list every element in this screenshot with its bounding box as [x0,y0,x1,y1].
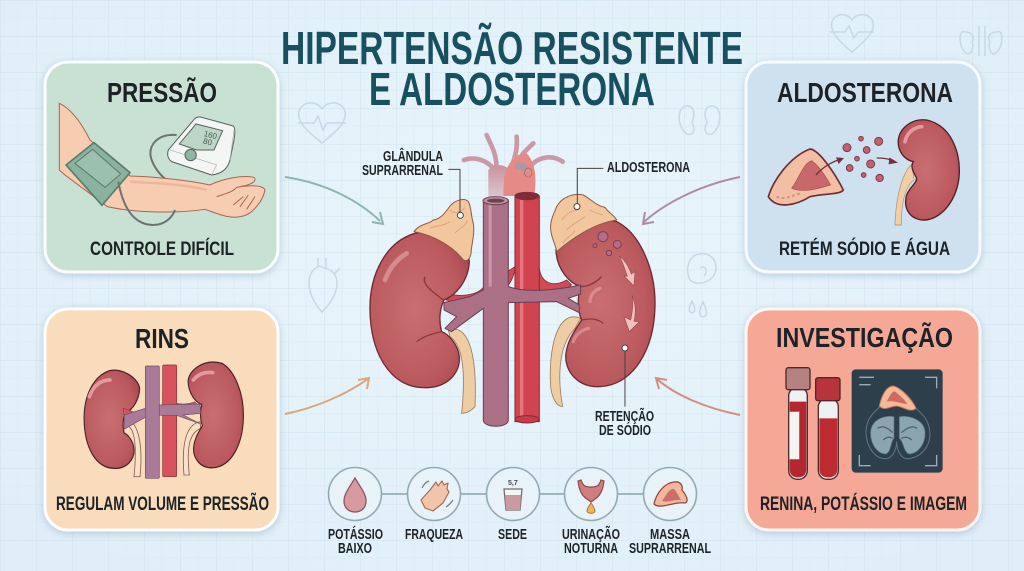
symptom: sede [486,468,540,543]
symptom: urinação noturna [562,468,620,557]
label: retenção de sódio: DE SÓDIO [599,421,651,439]
symptom: urinação noturna: URINAÇÃO [562,525,620,543]
icon: kidneys and vessels [84,362,243,478]
arrow: aldosterona to kidneys [643,177,740,224]
title: HIPERTENSÃO RESISTENTE [281,22,743,74]
symptom: fraqueza: FRAQUEZA [405,527,463,543]
icon: adrenal gland releasing hormone to kidney [768,120,959,225]
caption: retém sódio e água: RETÉM SÓDIO E ÁGUA [779,238,950,260]
symptom: fraqueza [405,468,463,543]
symptom row [328,468,711,557]
label: glândula suprarrenal: SUPRARRENAL [362,163,443,179]
symptom: potássio baixo: POTÁSSIO [328,526,383,543]
icon: arm with blood pressure cuff: 160 [203,129,218,141]
retention arrows [619,256,639,332]
symptom: massa suprarrenal [629,468,711,557]
heading: aldosterona: ALDOSTERONA [777,77,953,108]
heart and upper vessels [464,135,563,196]
symptom: massa suprarrenal: SUPRARRENAL [629,541,711,557]
kidneys [370,220,655,388]
leader lines [448,168,628,407]
heading: investigação: INVESTIGAÇÃO [776,322,953,353]
symptom: potássio baixo: BAIXO [338,541,372,557]
caption: controle difícil: CONTROLE DIFÍCIL [90,238,234,260]
panel: aldosterona [746,62,980,272]
icon: arm with blood pressure cuff: 80 [202,137,214,148]
title [281,22,743,115]
panel: pressão [45,62,278,272]
panel: investigação [746,309,980,530]
symptom: sede: 5,7 [508,480,518,487]
icon: arm with blood pressure cuff [59,103,265,225]
label: glândula suprarrenal [362,147,443,179]
symptom: urinação noturna: NOTURNA [564,541,618,557]
vena cava and renal veins [444,197,581,426]
label: aldosterona: ALDOSTERONA [607,160,690,176]
arrow: rins to kidneys [285,378,369,414]
panel: rins [45,309,278,530]
arrow: pressão to kidneys [285,177,383,224]
symptom: sede: SEDE [498,527,527,543]
adrenal glands [414,194,617,261]
caption: regulam volume e pressão: REGULAM VOLUME E PRESSÃO [56,493,269,515]
ureters [448,317,581,413]
title: E ALDOSTERONA [369,63,655,115]
faint decorative icons [298,15,1002,317]
sodium bubbles [593,232,621,256]
label: retenção de sódio [595,407,654,439]
label: retenção de sódio: RETENÇÃO [595,407,654,425]
heading: pressão: PRESSÃO [107,77,217,108]
central kidney and vessel illustration [370,135,655,426]
heading: rins: RINS [135,323,189,354]
symptom: potássio baixo [328,468,383,557]
icon: blood tubes and adrenal scan [786,368,943,479]
arrow: investigação to kidneys [656,378,740,415]
aorta and renal arteries [444,192,572,423]
symptom: massa suprarrenal: MASSA [650,527,690,543]
label: glândula suprarrenal: GLÂNDULA [383,147,443,165]
